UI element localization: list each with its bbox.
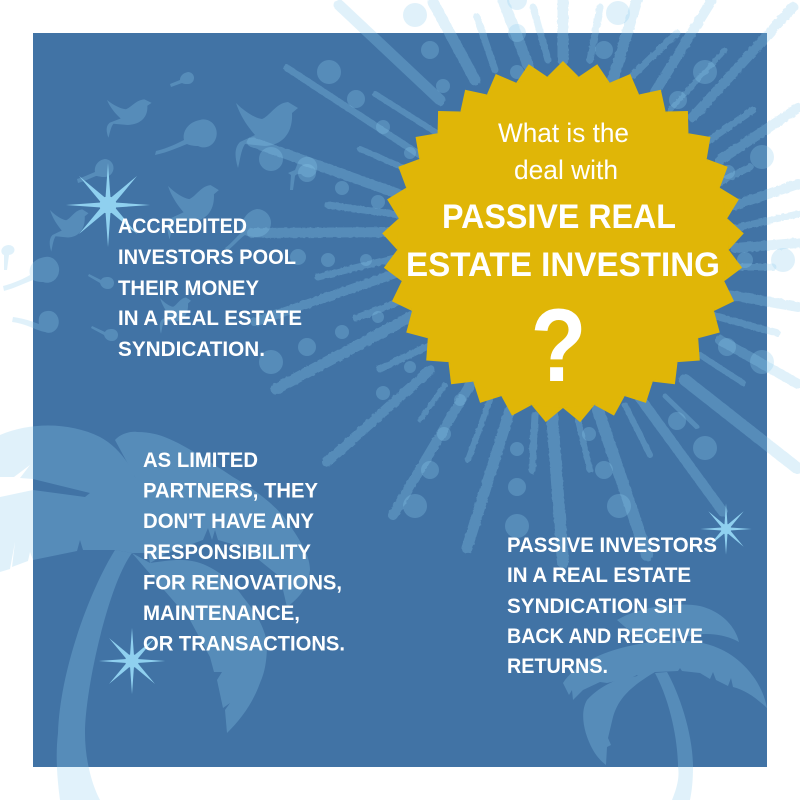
sunburst rays: [252, 0, 798, 562]
badge title text: [406, 118, 720, 404]
text block: limited partners: DON'T HAVE ANY: [143, 510, 314, 533]
text block: limited partners: RESPONSIBILITY: [143, 541, 311, 564]
badge title text: What is the: [498, 118, 629, 148]
text block: limited partners: OR TRANSACTIONS.: [143, 632, 345, 656]
text block: limited partners: PARTNERS, THEY: [143, 480, 318, 502]
badge title text: ESTATE INVESTING: [406, 246, 720, 284]
birds and flowers: [1, 72, 317, 341]
text block: accredited investors: THEIR MONEY: [118, 277, 259, 300]
sparkle star: lower left: [99, 628, 165, 694]
gold starburst badge: [381, 61, 745, 424]
text block: passive investors: [507, 534, 717, 678]
sunburst dots: [259, 0, 795, 538]
text block: accredited investors: [118, 215, 302, 361]
text block: limited partners: FOR RENOVATIONS,: [143, 572, 342, 594]
badge title text: deal with: [514, 155, 618, 185]
palm tree: left: [0, 425, 310, 800]
badge title text: PASSIVE REAL: [442, 198, 676, 236]
text block: accredited investors: INVESTORS POOL: [118, 246, 296, 269]
text block: passive investors: BACK AND RECEIVE: [507, 625, 703, 648]
text block: passive investors: PASSIVE INVESTORS: [507, 534, 717, 557]
text block: passive investors: SYNDICATION SIT: [507, 595, 686, 618]
sparkle star: right: [700, 503, 752, 555]
text block: limited partners: AS LIMITED: [143, 449, 258, 472]
text block: accredited investors: ACCREDITED: [118, 215, 247, 238]
text block: limited partners: [143, 449, 345, 656]
palm tree: right: [563, 605, 767, 800]
sparkle star: top left: [66, 163, 150, 247]
text block: passive investors: IN A REAL ESTATE: [507, 564, 691, 587]
text block: accredited investors: SYNDICATION.: [118, 338, 265, 361]
badge title text: ?: [530, 288, 586, 404]
text block: limited partners: MAINTENANCE,: [143, 602, 300, 625]
text block: accredited investors: IN A REAL ESTATE: [118, 307, 302, 330]
text block: passive investors: RETURNS.: [507, 655, 608, 678]
